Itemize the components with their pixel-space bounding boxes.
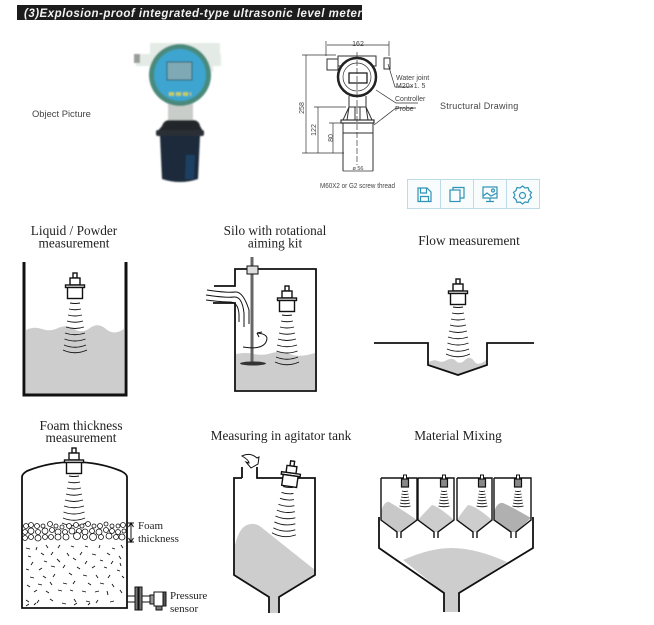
icon: save [418, 188, 431, 202]
panel: material mixing [379, 428, 533, 612]
sensor [64, 448, 84, 474]
panel: silo with rotational aiming kit [206, 223, 327, 391]
pressure sensor fitting [127, 587, 166, 610]
four bins [381, 478, 531, 538]
flow lines [206, 290, 249, 327]
heading: Silo with rotational [224, 223, 326, 238]
heading: Flow measurement [418, 233, 520, 248]
paddle [240, 362, 266, 366]
clamp [247, 266, 258, 274]
structural drawing of level meter [302, 41, 418, 171]
sensor [66, 273, 84, 298]
bin fills [381, 502, 531, 532]
panel: foam thickness measurement [22, 418, 207, 615]
foam thickness label: thickness [138, 533, 179, 545]
ultrasonic waves [63, 303, 87, 353]
bin sensors [400, 475, 524, 507]
waves [272, 486, 300, 538]
liquid particles [26, 545, 124, 606]
title bar: (3)Explosion-proof integrated-type ultrasonic level meter [24, 8, 362, 20]
waves [62, 476, 86, 526]
structural drawing labels [299, 41, 429, 190]
panel: liquid powder measurement [24, 223, 126, 395]
liquid fill [26, 325, 124, 394]
heading: Liquid / Powder [31, 223, 117, 238]
tank [22, 462, 127, 608]
heading: measurement [46, 430, 117, 445]
structural drawing labels: Controller [395, 96, 426, 103]
tank walls [24, 262, 126, 395]
product photo of level meter [134, 43, 221, 182]
pressure sensor label: Pressure [170, 590, 207, 602]
silo outline [213, 269, 316, 391]
waves [446, 307, 470, 357]
structural drawing labels: Water joint [396, 75, 429, 82]
heading: measurement [39, 236, 110, 250]
structural drawing labels: M60X2 or G2 screw thread [320, 183, 395, 190]
inlet arrow [242, 454, 259, 468]
channel [374, 343, 534, 375]
icon: gear [514, 186, 532, 204]
rotating shaft [250, 257, 254, 365]
sensor [448, 279, 468, 304]
structural drawing labels: Probe [395, 106, 414, 113]
heading: Material Mixing [414, 428, 502, 443]
sensor [278, 286, 296, 312]
structural drawing label: Structural Drawing [440, 101, 519, 111]
tank outline [234, 467, 315, 613]
icon: copy [450, 188, 464, 202]
foam bubbles [22, 522, 126, 541]
tilted sensor [280, 460, 302, 488]
toolbar [408, 180, 540, 208]
structural drawing labels: 80 [328, 134, 335, 142]
heading: Measuring in agitator tank [211, 428, 352, 443]
foam thickness label: Foam [138, 520, 163, 532]
heading: Foam thickness [39, 418, 123, 433]
large hopper [379, 517, 533, 612]
water fill [429, 358, 486, 375]
structural drawing labels: ø 56 [352, 166, 364, 172]
material fill [235, 524, 315, 613]
structural drawing labels: 122 [311, 124, 318, 136]
waves [275, 315, 299, 365]
foam dimension arrow [128, 523, 134, 542]
panel: measuring in agitator tank [211, 428, 352, 613]
pressure sensor label: sensor [170, 603, 198, 615]
material fill [236, 352, 315, 390]
structural drawing labels: M20×1. 5 [396, 83, 425, 90]
rotation arrow [243, 332, 267, 348]
hopper fill [403, 548, 507, 612]
object picture label: Object Picture [32, 108, 91, 119]
heading: aiming kit [248, 236, 302, 250]
structural drawing labels: 258 [299, 102, 306, 114]
structural drawing labels: 162 [352, 41, 364, 48]
icon: image on monitor [483, 187, 497, 202]
panel: flow measurement [374, 233, 534, 375]
